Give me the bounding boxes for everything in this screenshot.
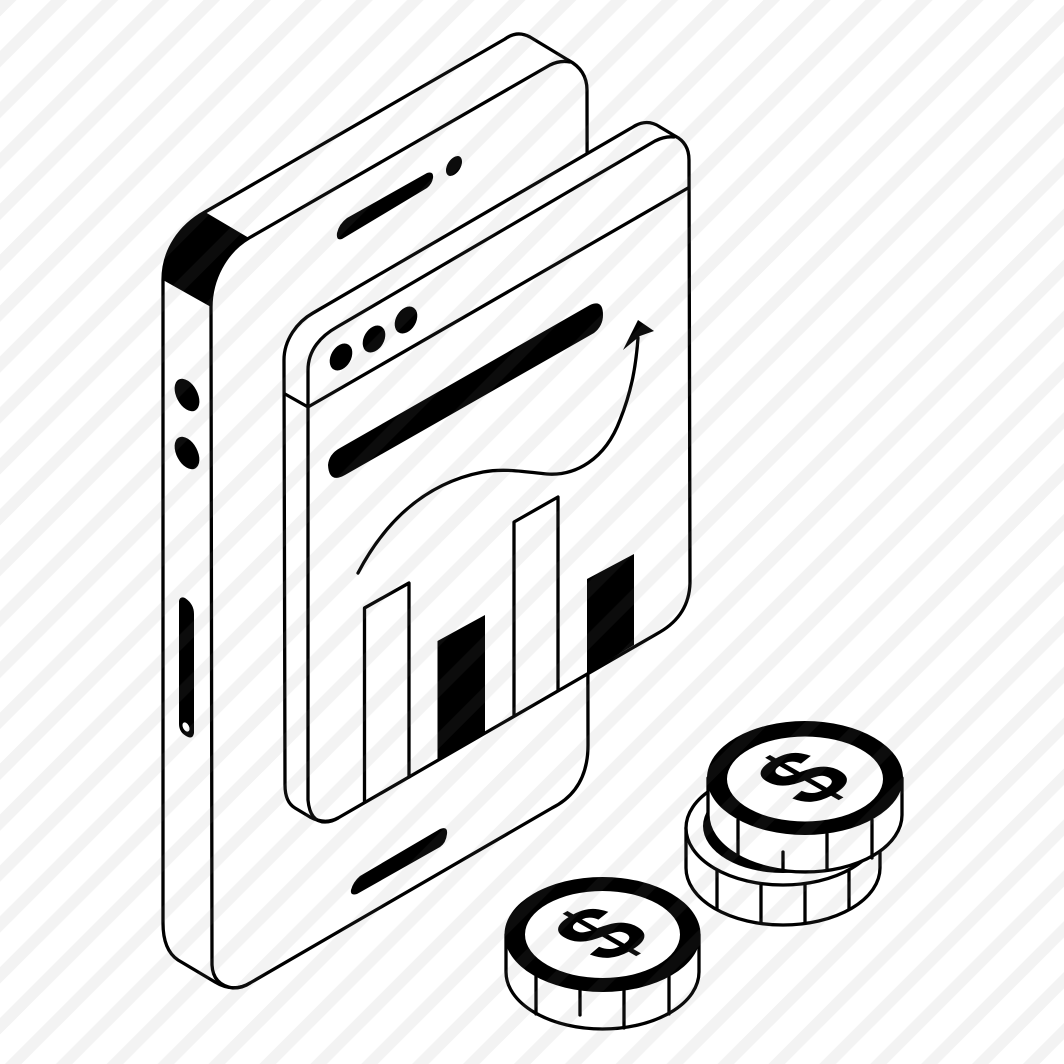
coin stack bbox=[504, 721, 903, 1029]
window dot 2 bbox=[358, 321, 390, 357]
top speaker slot bbox=[337, 173, 433, 239]
title bar placeholder bbox=[328, 303, 603, 478]
upper stacked coin bbox=[707, 721, 903, 872]
window front face edge bbox=[308, 137, 674, 822]
window dot 1 bbox=[325, 339, 357, 375]
bar chart bbox=[364, 497, 634, 802]
phone bbox=[163, 34, 588, 988]
dollar sign: $ bbox=[526, 890, 677, 977]
phone front face edge bbox=[211, 61, 570, 988]
window body bbox=[284, 122, 690, 821]
bottom home slot bbox=[351, 828, 447, 894]
front camera dot bbox=[443, 153, 465, 179]
window title bar divider bbox=[285, 188, 688, 407]
window dot 3 bbox=[390, 302, 422, 338]
phone body bbox=[163, 34, 588, 988]
black corner bbox=[163, 212, 249, 307]
growth trend arrow bbox=[358, 320, 654, 573]
lower stacked coin bbox=[686, 771, 880, 925]
side volume button 1 bbox=[170, 375, 204, 415]
side switch bbox=[179, 597, 194, 738]
single coin bbox=[504, 877, 700, 1029]
side volume button 2 bbox=[170, 433, 204, 473]
dollar sign: $ bbox=[729, 734, 879, 821]
chart window panel bbox=[284, 122, 690, 822]
